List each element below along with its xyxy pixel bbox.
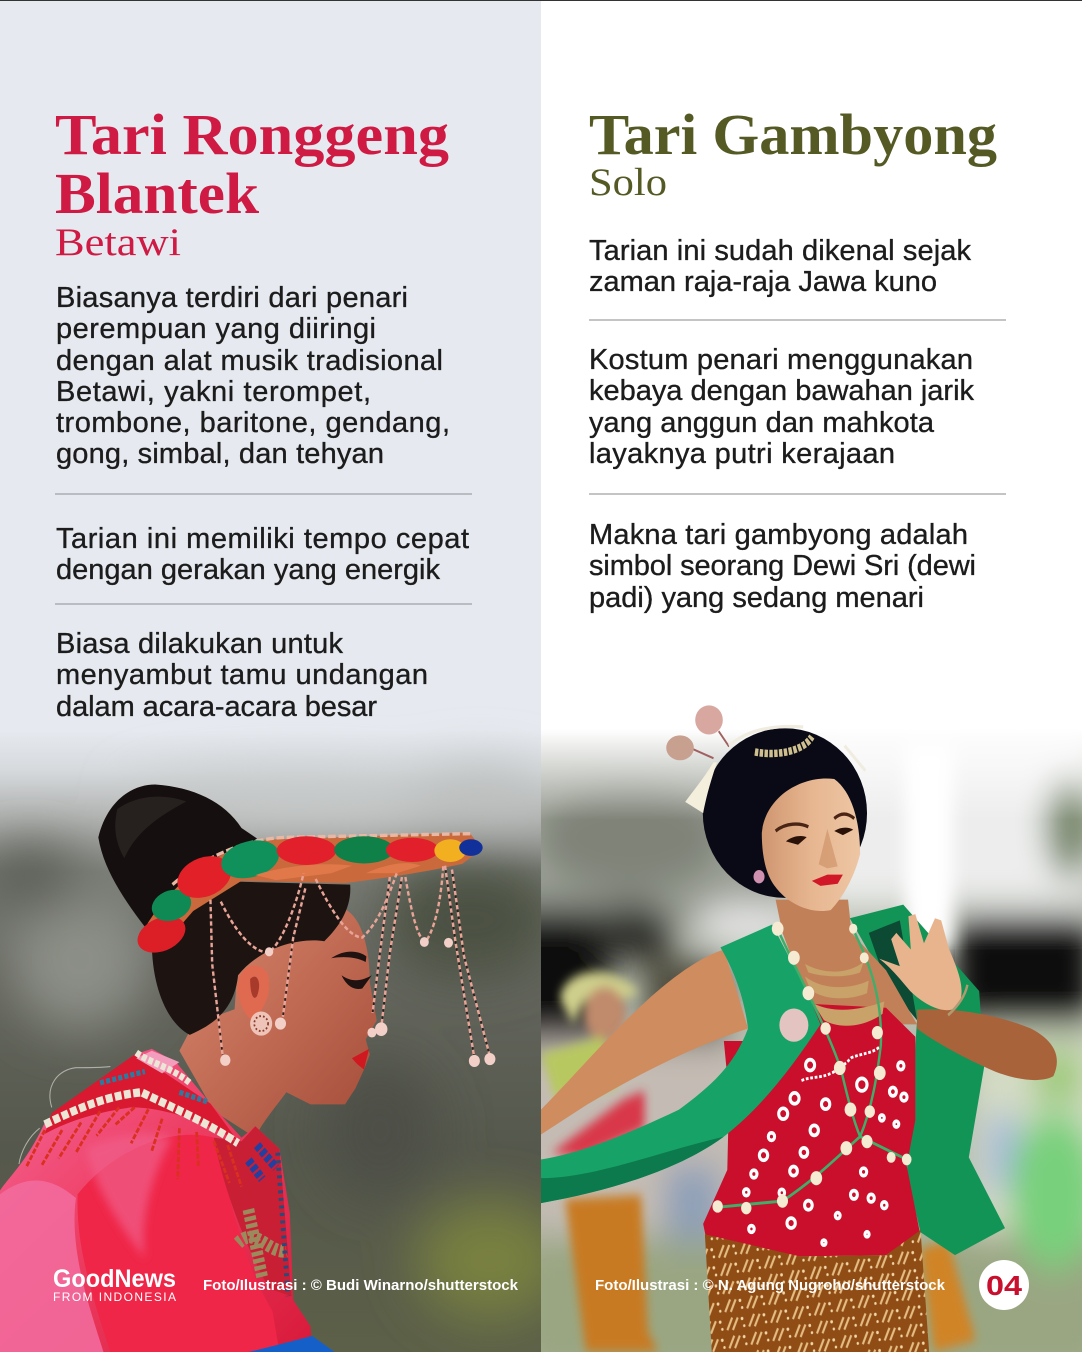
text block: menyambut tamu [56, 628, 428, 723]
flower necklace [717, 927, 907, 1207]
text block: penari dan alat musik: Betawi, yakni terompet, [56, 376, 371, 408]
beaded hat [133, 832, 483, 959]
text block: kostum: yang anggun dan mahkota [589, 407, 935, 439]
fringe [26, 1107, 242, 1187]
photo: dancer in red with beaded hat [0, 785, 495, 1352]
text block: menyambut tamu: Biasa dilakukan untuk [56, 628, 344, 660]
text block: menyambut tamu: dalam acara-acara besar [56, 691, 377, 723]
batik skirt [705, 1230, 929, 1352]
panel background with blurred photo backdrop [0, 0, 565, 1352]
heading: Tari Ronggeng Blantek: Blantek [55, 161, 260, 226]
hand [879, 914, 962, 1010]
panel: Tari Ronggeng Blantek [0, 0, 565, 1352]
text block: penari dan alat musik: gong, simbal, dan tehyan [56, 438, 384, 470]
ear [238, 966, 269, 1021]
bead strand dark spacers [210, 866, 490, 1058]
text block: sejarah [589, 235, 972, 298]
lower hair [152, 881, 350, 1035]
panel: Tari Gambyong [506, 102, 1082, 1352]
arms [541, 949, 748, 1135]
background dancer [541, 972, 976, 1352]
white column and building [905, 742, 953, 949]
text block: tempo: dengan gerakan yang energik [56, 554, 440, 586]
white fade [541, 690, 1082, 820]
text block: kostum: layaknya putri kerajaan [589, 438, 895, 470]
eye and brow [331, 952, 372, 989]
subheading: Betawi: Betawi [55, 221, 181, 264]
top hair [703, 728, 867, 898]
red top [703, 1004, 920, 1256]
heading: Tari Ronggeng Blantek: Tari Ronggeng [55, 102, 449, 167]
hair bun [98, 785, 257, 927]
brooch [779, 1009, 808, 1042]
text block: kostum: Kostum penari menggunakan [589, 344, 973, 376]
dress [0, 1049, 312, 1352]
blue underdress [248, 1336, 335, 1352]
flyaway hair wire [19, 1067, 110, 1164]
logo: GoodNews from Indonesia [53, 1265, 176, 1304]
photo credit left: Foto/Ilustrasi : © Budi Winarno/shutterstock [203, 1277, 519, 1294]
text block: tempo: Tarian ini memiliki tempo cepat [56, 523, 469, 555]
bead drops [220, 937, 495, 1067]
text block: menyambut tamu: menyambut tamu undangan [56, 659, 428, 691]
neck and chest [776, 900, 917, 1024]
neck and face [179, 909, 377, 1138]
text block: tempo [56, 523, 469, 586]
text block: kostum: kebaya dengan bawahan jarik [589, 375, 974, 407]
text block: makna: padi) yang sedang menari [589, 582, 924, 614]
text block: makna [589, 519, 976, 614]
photo backdrop: blurred park and crowd [541, 736, 1082, 1352]
page number badge [979, 1260, 1029, 1310]
text block: makna: Makna tari gambyong adalah [589, 519, 968, 551]
face [762, 778, 860, 911]
text block: kostum [589, 344, 974, 470]
gold necklace [805, 962, 884, 1026]
heading: Tari Gambyong: Tari Gambyong [589, 102, 997, 167]
heading: Tari Ronggeng Blantek [55, 102, 449, 226]
text block: penari dan alat musik: perempuan yang diiringi [56, 313, 376, 345]
logo: GoodNews from Indonesia: FROM INDONESIA [53, 1290, 176, 1304]
text block: penari dan alat musik: trombone, baritone, gendang, [56, 407, 450, 439]
text block: penari dan alat musik: dengan alat musik tradisional [56, 345, 443, 377]
subheading: Solo: Solo [589, 161, 667, 204]
page number badge: 04 [986, 1270, 1022, 1301]
earring [250, 1011, 272, 1036]
embroidery [45, 1092, 238, 1143]
back of shawl [850, 905, 1005, 1255]
text block: sejarah: zaman raja-raja Jawa kuno [589, 266, 937, 298]
logo: GoodNews from Indonesia: GoodNews [53, 1265, 176, 1293]
text block: makna: simbol seorang Dewi Sri (dewi [589, 550, 976, 582]
text block: sejarah: Tarian ini sudah dikenal sejak [589, 235, 972, 267]
photo: dancer in green shawl and red top [541, 705, 1057, 1352]
photo credit right: Foto/Ilustrasi : © N. Agung Nugroho/shutterstock [595, 1277, 946, 1294]
text block: penari dan alat musik [56, 282, 450, 470]
bead strands [210, 866, 490, 1058]
hair ornaments [666, 705, 865, 883]
tie-dye dots [744, 1060, 907, 1245]
front shawl [541, 925, 820, 1203]
text block: penari dan alat musik: Biasanya terdiri dari penari [56, 282, 408, 314]
lips [352, 1049, 369, 1070]
